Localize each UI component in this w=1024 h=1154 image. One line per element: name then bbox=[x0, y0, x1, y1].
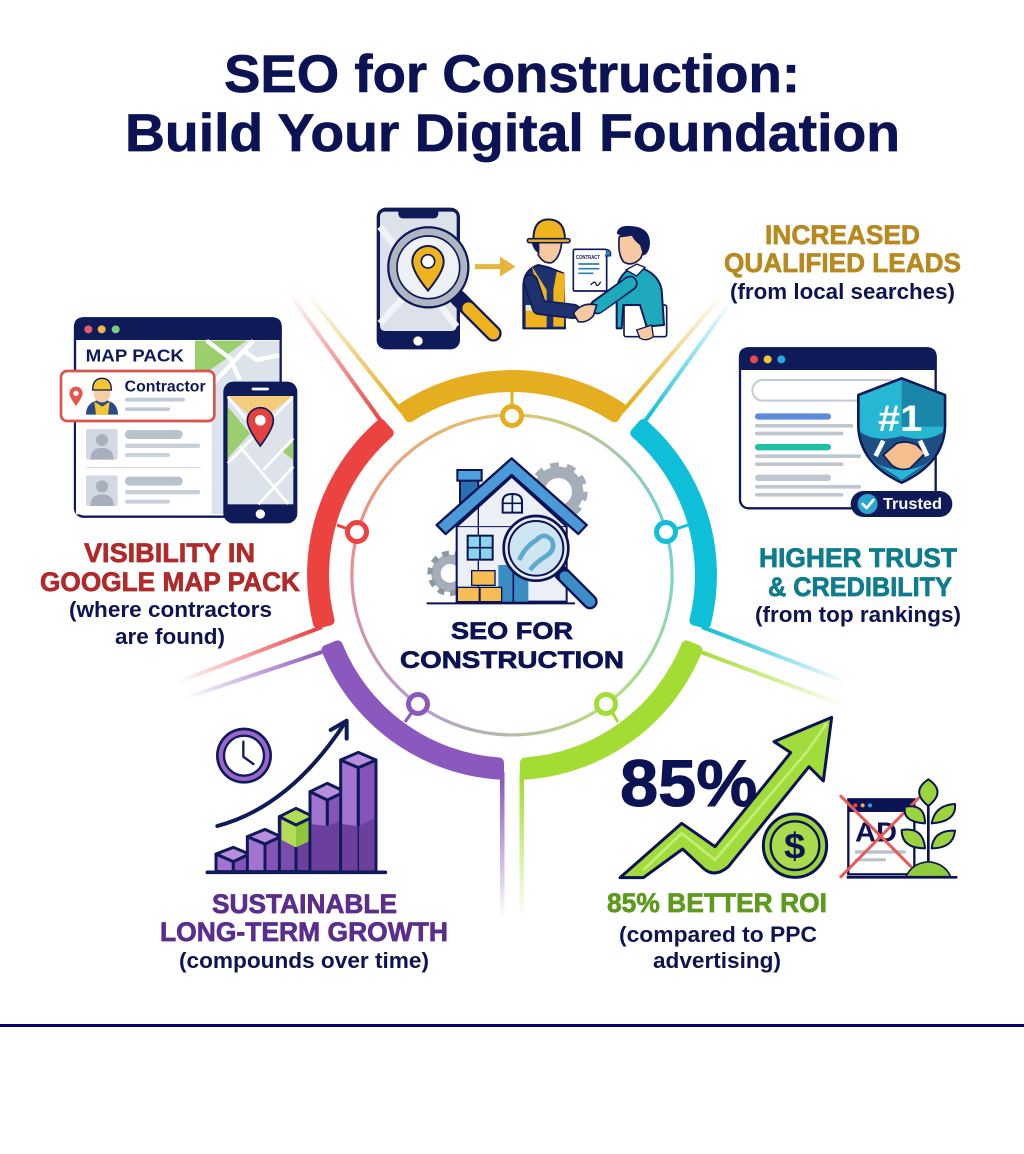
label: 85 percent better roi: advertising) bbox=[653, 948, 781, 973]
icon: map pack browser and phone: Contractor bbox=[125, 379, 206, 396]
icon: search results with #1 shield: #1 bbox=[878, 397, 922, 439]
label: 85 percent better roi: 85% BETTER ROI bbox=[607, 888, 827, 918]
label: visibility in google map pack: (where contractors bbox=[69, 597, 272, 622]
segment: gold bbox=[307, 293, 722, 417]
title: SEO for Construction: bbox=[224, 45, 800, 104]
icon: 85 percent arrow, coin, crossed ad and plant: $ bbox=[784, 826, 805, 867]
center label bbox=[400, 618, 624, 674]
label: increased qualified leads: INCREASED bbox=[765, 220, 920, 250]
segment: red bbox=[178, 293, 389, 682]
center label: SEO FOR bbox=[451, 618, 573, 645]
label: 85 percent better roi bbox=[607, 888, 827, 973]
clock bbox=[216, 728, 272, 784]
label: visibility in google map pack: GOOGLE MAP PACK bbox=[40, 567, 300, 597]
node: cyan bbox=[656, 522, 688, 542]
client bbox=[573, 226, 667, 340]
node: green bbox=[596, 694, 618, 722]
label: sustainable long-term growth: SUSTAINABLE bbox=[212, 889, 397, 919]
label: visibility in google map pack: are found) bbox=[115, 624, 225, 649]
label: increased qualified leads: (from local searches) bbox=[730, 279, 955, 304]
label: 85 percent better roi: (compared to PPC bbox=[619, 922, 817, 947]
label: visibility in google map pack bbox=[40, 538, 300, 649]
icon: 85 percent arrow, coin, crossed ad and plant bbox=[620, 717, 957, 878]
label: higher trust and credibility bbox=[755, 543, 961, 627]
label: sustainable long-term growth bbox=[160, 889, 448, 973]
ring diagram bbox=[178, 293, 846, 918]
label: higher trust and credibility: & CREDIBILITY bbox=[768, 572, 952, 602]
label: higher trust and credibility: HIGHER TRUST bbox=[759, 543, 957, 573]
icon: house with gears and magnifier bbox=[427, 458, 590, 603]
segment: purple bbox=[185, 645, 504, 918]
icon: 85 percent arrow, coin, crossed ad and plant: 85% bbox=[620, 746, 757, 820]
icon: search results with #1 shield bbox=[739, 347, 952, 517]
label: higher trust and credibility: (from top rankings) bbox=[755, 602, 961, 627]
segment: green bbox=[520, 645, 846, 918]
worker bbox=[523, 219, 573, 328]
node: red bbox=[337, 522, 366, 542]
footer rule bbox=[0, 1024, 1024, 1027]
icon: map pack browser and phone: MAP PACK bbox=[86, 346, 184, 366]
title bbox=[125, 45, 900, 163]
contract bbox=[573, 249, 611, 291]
label: visibility in google map pack: VISIBILITY IN bbox=[84, 538, 255, 568]
title: Build Your Digital Foundation bbox=[125, 104, 900, 163]
label: sustainable long-term growth: LONG-TERM GROWTH bbox=[160, 917, 448, 947]
label: sustainable long-term growth: (compounds over time) bbox=[179, 948, 429, 973]
contract: CONTRACT bbox=[576, 255, 601, 261]
segment: cyan bbox=[635, 300, 846, 682]
label: increased qualified leads: QUALIFIED LEADS bbox=[724, 248, 961, 278]
icon: 85 percent arrow, coin, crossed ad and plant: AD bbox=[855, 817, 897, 848]
node: purple bbox=[405, 694, 428, 722]
icon: local search to contractor handshake bbox=[377, 208, 667, 349]
label: increased qualified leads bbox=[724, 220, 961, 304]
icon: search results with #1 shield: Trusted bbox=[883, 496, 942, 513]
icon: rising bar chart with clock bbox=[207, 721, 385, 872]
inner ring bbox=[352, 415, 672, 735]
icon: map pack browser and phone bbox=[61, 317, 297, 523]
center label: CONSTRUCTION bbox=[400, 647, 624, 674]
node: gold bbox=[502, 392, 522, 426]
